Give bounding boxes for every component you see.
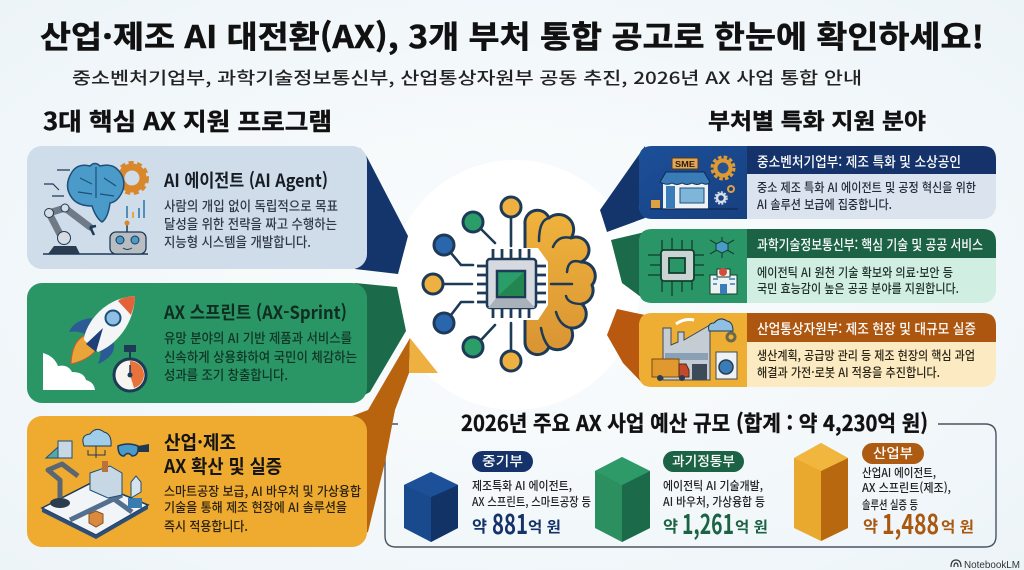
pill: 과기정통부	[663, 450, 744, 472]
card body: 지능형 시스템을 개발합니다.	[164, 231, 311, 251]
budget panel	[385, 407, 996, 547]
card body: 스마트공장 보급, AI 바우처 및 가상융합	[164, 481, 361, 500]
panel: AI agent	[27, 146, 367, 269]
card header: 중소벤처기업부: 제조 특화 및 소상공인	[757, 152, 961, 172]
amount 1,261	[663, 503, 768, 542]
panel: industry ministry	[639, 313, 996, 387]
panel: SME ministry	[639, 146, 996, 219]
card header: 과학기술정보통신부: 핵심 기술 및 공공 서비스	[757, 235, 983, 255]
amount 1,488	[863, 503, 974, 542]
cube: blue	[404, 472, 458, 542]
heading: ministry areas: 부처별 특화 지원 분야	[708, 104, 926, 136]
budget: SME ministry	[404, 450, 591, 542]
amount 1,488: 약	[863, 513, 878, 537]
card body: 즉시 적용합니다.	[164, 516, 248, 535]
pill: 과기정통부: 과기정통부	[672, 450, 735, 470]
budget text: 산업AI 에이전트,	[862, 464, 936, 481]
arrow: right orange	[607, 309, 645, 386]
card heading: 산업·제조	[164, 428, 236, 455]
budget text: AI 바우처, 가상융합 등	[663, 493, 765, 510]
icon: factory, truck, washer	[652, 319, 737, 381]
circuit lines	[443, 217, 511, 351]
card body	[757, 177, 976, 213]
card body: 국민 효능감이 높은 공공 분야를 지원합니다.	[757, 278, 959, 297]
arrow: green	[355, 283, 406, 400]
amount 881: 억 원	[528, 516, 561, 537]
icon: chip, network, hospital	[648, 237, 737, 296]
amount 1,261: 억 원	[735, 516, 768, 537]
icon: rocket and stopwatch	[43, 296, 146, 391]
amount 881	[472, 503, 561, 542]
card body: 해결과 가전·로봇 AI 적용을 추진합니다.	[757, 362, 940, 381]
card body: 에이전틱 AI 원천 기술 확보와 의료·보안 등	[757, 262, 953, 281]
budget: industry ministry	[794, 442, 974, 542]
card body	[164, 481, 361, 535]
heading: core programs: 3대 핵심 AX 지원 프로그램	[43, 102, 332, 137]
budget text: AX 스프린트(제조),	[862, 479, 951, 496]
chip	[476, 248, 548, 320]
icon: SME store	[650, 157, 738, 209]
amount 1,488: 1,488	[882, 503, 939, 542]
budget heading: 2026년 주요 AX 사업 예산 규모 (합계 : 약 4,230억 원)	[461, 407, 928, 438]
budget text: 에이전틱 AI 기술개발,	[663, 477, 763, 494]
arrow: navy	[355, 148, 408, 274]
icon: smart factory	[42, 429, 149, 539]
card heading	[163, 428, 282, 479]
icon: SME store: SME	[675, 159, 695, 169]
card header: 산업통상자원부: 제조 현장 및 대규모 실증	[757, 319, 976, 339]
amount 881: 약	[472, 513, 487, 537]
card body: 달성을 위한 전략을 짜고 수행하는	[164, 213, 337, 233]
subtitle: 중소벤처기업부, 과학기술정보통신부, 산업통상자원부 공동 추진, 2026년 AX 사업 통합 안내	[72, 64, 862, 89]
arrow: right green	[611, 232, 645, 300]
circuit nodes	[423, 197, 521, 371]
amount 881: 881	[492, 503, 528, 542]
card body	[757, 262, 959, 297]
icon: brain, gear, robot	[43, 163, 148, 254]
pill: 산업부	[862, 442, 924, 464]
card body: AI 솔루션 보급에 집중합니다.	[757, 194, 892, 213]
card body: 신속하게 상용화하여 국민이 체감하는	[164, 346, 357, 366]
card body: 기술을 통해 제조 현장에 AI 솔루션을	[164, 497, 347, 516]
card body: 생산계획, 공급망 관리 등 제조 현장의 핵심 과업	[757, 345, 975, 364]
budget text	[663, 477, 765, 510]
card body: 중소 제조 특화 AI 에이전트 및 공정 혁신을 위한	[757, 177, 976, 196]
cube: green	[595, 457, 650, 542]
pill: 중기부	[472, 450, 533, 472]
card heading: AX 확산 및 실증	[163, 452, 282, 479]
card body	[164, 195, 338, 251]
central icon: chip and brain	[423, 197, 595, 371]
budget text: 제조특화 AI 에이전트,	[472, 477, 572, 494]
card body: 사람의 개입 없이 독립적으로 목표	[164, 195, 338, 215]
panel: AX sprint	[27, 283, 367, 403]
budget text	[472, 477, 591, 510]
title: 산업·제조 AI 대전환(AX), 3개 부처 통합 공고로 한눈에 확인하세요!	[40, 12, 984, 57]
card heading: AI 에이전트 (AI Agent)	[163, 167, 328, 193]
card heading: AX 스프린트 (AX-Sprint)	[163, 299, 347, 325]
card body	[757, 345, 975, 381]
amount 1,261: 약	[663, 513, 678, 537]
panel: science ministry	[639, 229, 996, 303]
amount 1,488: 억 원	[941, 516, 974, 537]
card body: 성과를 조기 창출합니다.	[164, 364, 288, 384]
card body	[164, 327, 357, 384]
budget text: AX 스프린트, 스마트공장 등	[472, 493, 591, 510]
budget: science ministry	[595, 450, 768, 542]
panel: industry diffusion	[27, 416, 367, 547]
pill: 중기부: 중기부	[482, 450, 523, 470]
amount 1,261: 1,261	[682, 503, 734, 542]
cube: gold	[794, 443, 848, 541]
budget text: 솔루션 실증 등	[862, 496, 918, 513]
card body: 유망 분야의 AI 기반 제품과 서비스를	[164, 327, 352, 347]
pill: 산업부: 산업부	[873, 442, 913, 462]
budget text	[862, 464, 951, 513]
brain half	[525, 210, 595, 355]
arrow: orange	[352, 338, 438, 540]
arrow: right navy	[600, 146, 645, 232]
brain midline	[551, 283, 572, 285]
